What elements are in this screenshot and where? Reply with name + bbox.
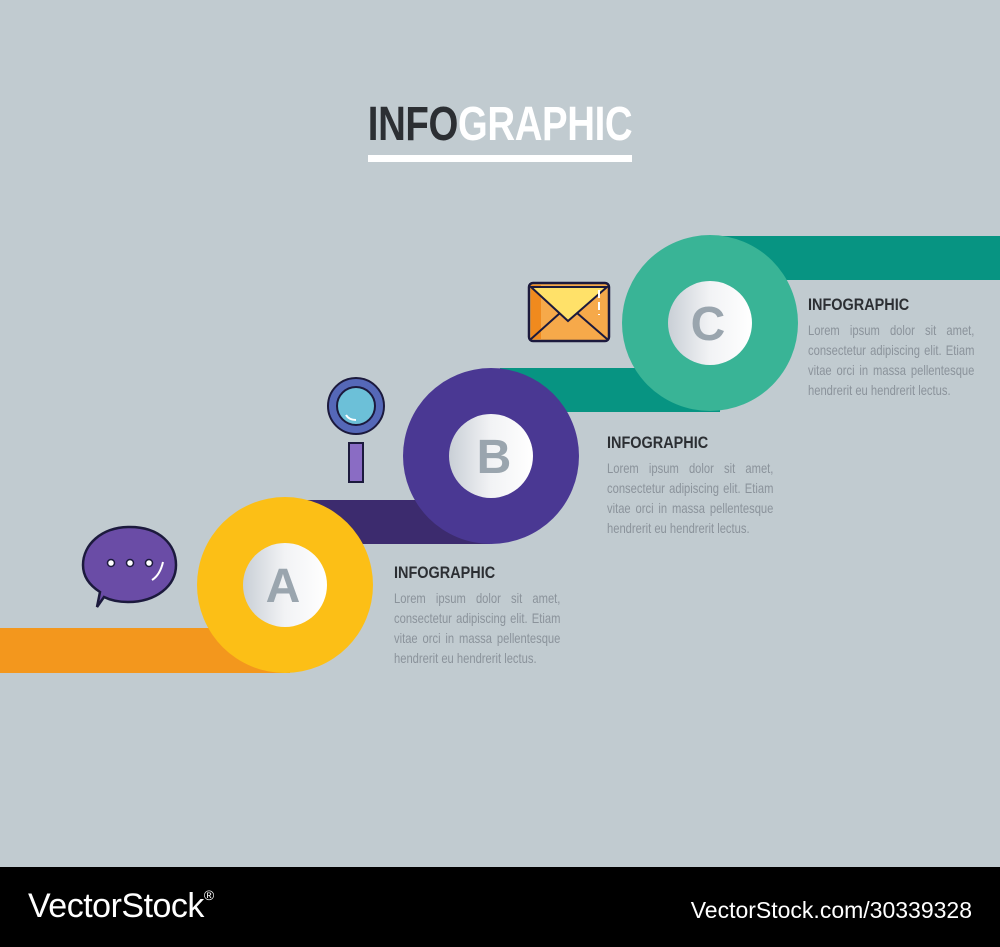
icon: magnifier (328, 378, 384, 482)
text block A: Lorem ipsum dolor sit amet, (394, 590, 560, 606)
circle C: C (691, 298, 725, 351)
text block C: hendrerit eu hendrerit lectus. (808, 382, 951, 398)
text block B (607, 433, 773, 536)
bar: top teal (710, 236, 1000, 280)
text block A: consectetur adipiscing elit. Etiam (394, 610, 560, 626)
text block A: hendrerit eu hendrerit lectus. (394, 650, 537, 666)
footer: VectorStock.com/30339328 (691, 897, 972, 923)
circle B (403, 368, 579, 544)
text block C: INFOGRAPHIC (808, 295, 909, 314)
text block B: vitae orci in massa pellentesque (607, 500, 773, 516)
text block C: Lorem ipsum dolor sit amet, (808, 322, 974, 338)
text block C: vitae orci in massa pellentesque (808, 362, 974, 378)
icon: envelope (529, 283, 609, 341)
circle A: A (266, 560, 300, 613)
text block A: vitae orci in massa pellentesque (394, 630, 560, 646)
bar: dark purple (300, 500, 490, 544)
circle A (197, 497, 373, 673)
text block B: consectetur adipiscing elit. Etiam (607, 480, 773, 496)
circle B: B (477, 431, 511, 484)
footer (0, 867, 1000, 947)
text block A (394, 563, 560, 666)
text block C: consectetur adipiscing elit. Etiam (808, 342, 974, 358)
text block B: hendrerit eu hendrerit lectus. (607, 520, 750, 536)
text block A: INFOGRAPHIC (394, 563, 495, 582)
text block C (808, 295, 974, 398)
text block B: Lorem ipsum dolor sit amet, (607, 460, 773, 476)
circle C (622, 235, 798, 411)
icon: speech bubble (83, 527, 176, 607)
footer: VectorStock® (28, 887, 214, 925)
text block B: INFOGRAPHIC (607, 433, 708, 452)
bar: teal lower (500, 368, 720, 412)
bar: orange (0, 628, 290, 673)
title: INFOGRAPHIC (368, 98, 632, 151)
